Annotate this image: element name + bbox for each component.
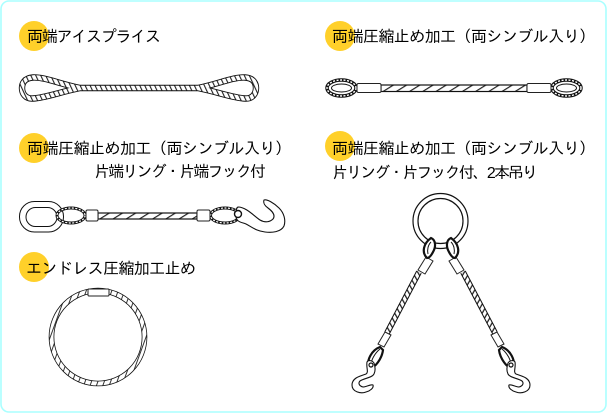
heading line 2: 片端リング・片端フック付 (94, 163, 266, 181)
highlight circle (19, 21, 49, 51)
heading line 1: 両端圧縮止め加工（両シンブル入り） (332, 140, 595, 158)
highlight circle (325, 21, 355, 51)
heading: エンドレス圧縮加工止め (26, 260, 196, 278)
heading line 2: 片リング・片フック付、2本吊り (332, 164, 538, 182)
panel: endless compression (19, 252, 196, 384)
heading: 両端アイスプライス (27, 28, 161, 46)
highlight circle (19, 133, 49, 163)
sling: master ring and two legs (352, 194, 530, 393)
panel: ring and hook ends (19, 133, 291, 232)
rope: ring and hook (20, 200, 285, 232)
highlight circle (325, 131, 355, 161)
heading: 両端圧縮止め加工（両シンブル入り） (332, 28, 595, 46)
rope: thimble eyes (327, 80, 581, 96)
rope: endless ring (52, 289, 144, 384)
panel: eye splice both ends (19, 21, 256, 99)
highlight circle (19, 252, 49, 282)
rope: eye splice (22, 77, 256, 99)
icon: hook (236, 200, 285, 232)
panel: compression both ends with thimbles (325, 21, 595, 96)
panel: two-leg sling (325, 131, 595, 393)
heading line 1: 両端圧縮止め加工（両シンブル入り） (27, 140, 291, 158)
